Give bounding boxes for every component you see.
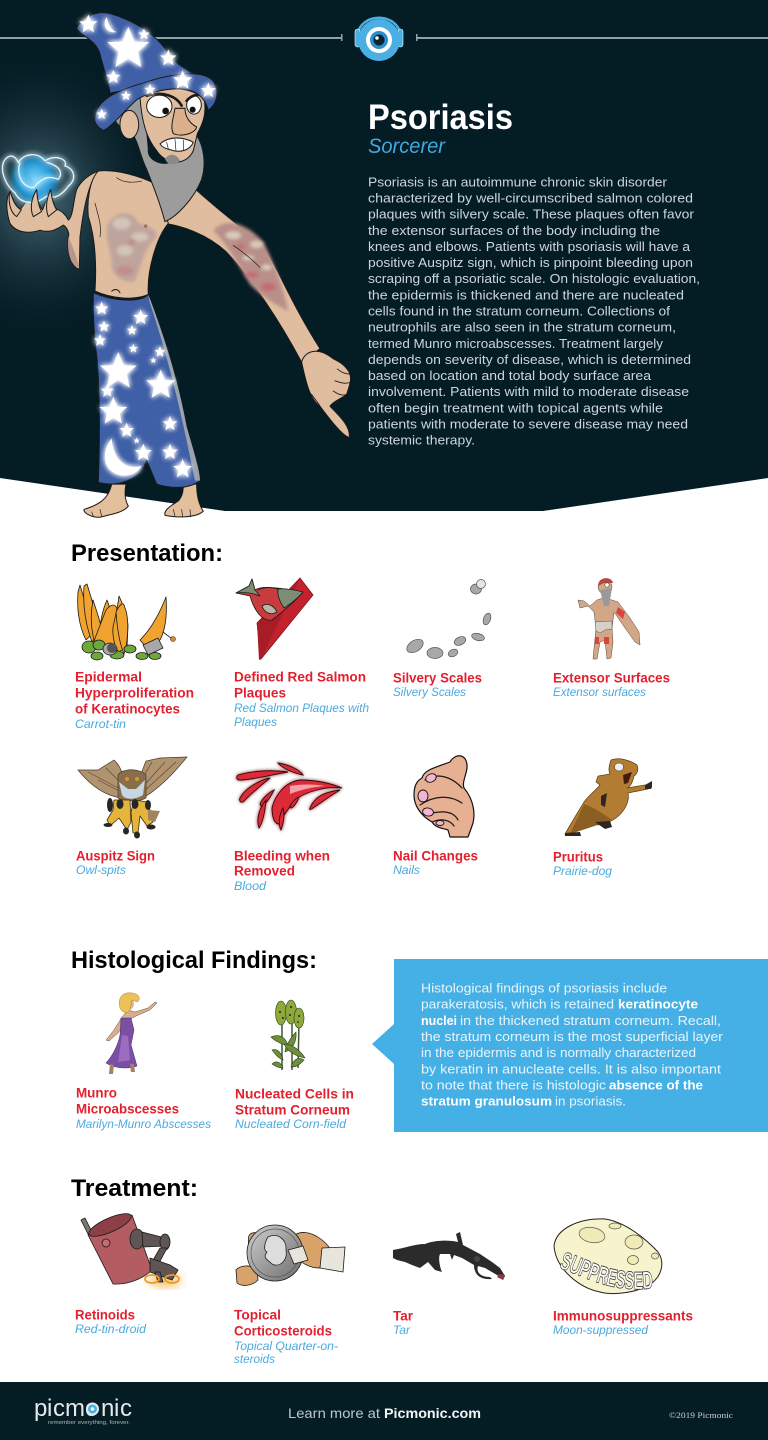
item: immunosuppressants (553, 1218, 693, 1337)
icon: prairie dog (565, 759, 652, 836)
item: tar (393, 1232, 505, 1337)
icon: carrot-tin (78, 584, 176, 660)
item: extensor surfaces (553, 578, 670, 699)
item: auspitz sign: Owl-spits (76, 865, 126, 877)
item: munro microabscesses: Microabscesses (76, 1102, 179, 1116)
wizard left arm and hand (7, 171, 98, 269)
header rule right (416, 34, 768, 41)
item: immunosuppressants: Moon-suppressed (553, 1325, 649, 1337)
heading: presentation: Presentation: (71, 540, 223, 567)
label: Extensor Surfaces (553, 670, 670, 686)
callout text: absence of the (609, 1078, 703, 1092)
hero panel background (0, 0, 768, 511)
footer (0, 1382, 768, 1440)
description text block: often begin treatment with topical agents while (368, 400, 663, 415)
footer call to action (288, 1405, 481, 1421)
description text block: the extensor surfaces of the body including the (368, 223, 660, 238)
label: Immunosuppressants (553, 1308, 693, 1324)
description text block: patients with moderate to severe disease may need (368, 416, 688, 431)
label: Defined Red Salmon (234, 670, 366, 684)
item: munro microabscesses: Marilyn-Munro Abscesses (76, 1119, 211, 1131)
wizard torso with chest plaque (88, 171, 168, 298)
label: Epidermal (75, 670, 142, 684)
label: Nail Changes (393, 848, 478, 864)
callout: histological explanation (372, 959, 768, 1132)
wizard face (120, 88, 205, 164)
glowing blue orb (2, 155, 74, 202)
item: nucleated cells: Nucleated Corn-field (235, 1119, 347, 1131)
item: munro microabscesses (76, 993, 211, 1131)
description text block: the epidermis is thickened and there are nucleated (368, 287, 684, 302)
item: pruritus (553, 759, 652, 878)
item: epidermal hyperproliferation (75, 584, 194, 731)
description text block: termed Munro microabscesses. Treatment largely (368, 336, 663, 351)
item: retinoids (75, 1209, 181, 1336)
header rule left (0, 34, 342, 41)
heading: histological findings: Histological Findings: (71, 947, 317, 974)
callout text: stratum granulosum (421, 1094, 552, 1109)
label: Retinoids (75, 1308, 135, 1322)
description text block: based on location and total body surface area (368, 368, 652, 383)
copyright: ©2019 Picmonic (669, 1410, 733, 1420)
item: extensor surfaces: Extensor surfaces (553, 687, 646, 699)
icon: tar brush (393, 1232, 505, 1280)
callout text: Histological findings of psoriasis include (421, 980, 667, 996)
footer logo: remember everything, forever. (48, 1420, 131, 1426)
item: defined red salmon plaques: Plaques (234, 717, 277, 729)
callout text: in the thickened stratum corneum. Recall, (460, 1013, 721, 1028)
icon: mini wizard (578, 578, 640, 659)
wizard hat (77, 13, 217, 130)
title: Psoriasis (368, 98, 513, 137)
wizard beard and hair (112, 93, 204, 222)
item: auspitz sign (76, 757, 187, 877)
icon: salmon on plaque (236, 578, 313, 660)
icon: red-tin-droid (81, 1209, 181, 1287)
label: Topical (234, 1308, 281, 1322)
description text block: depends on severity of disease, which is determined (368, 352, 691, 367)
item: topical corticosteroids: Topical Quarter-on- (234, 1341, 338, 1353)
callout text: in psoriasis. (555, 1094, 626, 1109)
item: retinoids: Red-tin-droid (75, 1324, 147, 1336)
item: topical corticosteroids: steroids (234, 1354, 275, 1366)
label: Silvery Scales (393, 670, 482, 686)
item: nucleated cells: Stratum Corneum (235, 1102, 350, 1118)
item: topical corticosteroids: Corticosteroids (234, 1324, 332, 1338)
label: Munro (76, 1086, 117, 1100)
item: silvery scales (393, 580, 492, 699)
item: epidermal hyperproliferation: Carrot-tin (75, 719, 126, 731)
item: bleeding when removed: Removed (234, 864, 295, 878)
description text block: plaques with silvery scale. These plaques often favor (368, 207, 695, 222)
description text block (368, 174, 700, 448)
footer logo: picmonic (34, 1395, 132, 1422)
item: bleeding when removed (234, 763, 342, 893)
icon: moon suppressed: SUPPRESSED (560, 1252, 652, 1290)
callout box with pointer (372, 959, 768, 1132)
wizard pointing hand (302, 351, 351, 437)
description text block: systemic therapy. (368, 432, 475, 448)
description text block: cells found in the stratum corneum. Collections of (368, 304, 670, 318)
description text block: involvement. Patients with mild to moderate disease (368, 384, 689, 399)
callout text: in the epidermis and is normally characterized (421, 1045, 696, 1060)
item: tar: Tar (393, 1325, 411, 1337)
description text block: knees and elbows. Patients with psoriasis will have a (368, 239, 691, 254)
description text block: neutrophils are also seen in the stratum corneum, (368, 320, 676, 335)
footer call to action: Learn more at (288, 1405, 380, 1421)
callout text: nuclei (421, 1013, 457, 1028)
callout text: by keratin in anucleate cells. It is also important (421, 1061, 721, 1076)
illustration: psoriasis sorcerer (2, 13, 351, 517)
item: defined red salmon plaques (234, 578, 369, 729)
description text block: positive Auspitz sign, which is pinpoint bleeding upon (368, 255, 693, 270)
subtitle: Sorcerer (368, 135, 446, 158)
item: bleeding when removed: Blood (234, 881, 267, 893)
label: Pruritus (553, 850, 603, 864)
item: epidermal hyperproliferation: of Keratinocytes (75, 702, 180, 716)
label: Tar (393, 1308, 414, 1324)
item: silvery scales: Silvery Scales (393, 687, 466, 699)
item: nail changes: Nails (393, 865, 420, 877)
description text block: scraping off a psoriatic scale. On histologic evaluation, (368, 271, 700, 286)
callout text (421, 980, 724, 1109)
item: defined red salmon plaques: Red Salmon Plaques with (234, 703, 369, 715)
icon: corn field (271, 1000, 305, 1070)
label: Bleeding when (234, 848, 330, 864)
heading: treatment: Treatment: (71, 1175, 198, 1202)
icon: fist with nails (414, 756, 474, 837)
wizard right arm with plaque (163, 183, 320, 362)
wizard feet and legs (84, 484, 203, 517)
wizard fingers over orb (9, 190, 57, 217)
label: Nucleated Cells in (235, 1086, 354, 1102)
icon: blood splatter (237, 763, 342, 830)
footer call to action: Picmonic.com (384, 1405, 481, 1421)
description text block: Psoriasis is an autoimmune chronic skin disorder (368, 174, 668, 190)
item: nucleated cells (235, 1000, 354, 1131)
description text block: characterized by well-circumscribed salmon colored (368, 191, 693, 206)
wizard star pants (93, 293, 200, 487)
icon: quarter on steroids (236, 1225, 345, 1285)
icon: picmonic eye with headphones (355, 18, 403, 61)
orb glow backdrop (0, 45, 165, 345)
icon: owl (78, 757, 187, 838)
icon: marilyn (106, 993, 157, 1074)
callout text: keratinocyte (618, 997, 698, 1012)
item: epidermal hyperproliferation: Hyperproliferation (75, 686, 194, 700)
item: defined red salmon plaques: Plaques (234, 686, 286, 700)
callout text: parakeratosis, which is retained (421, 997, 614, 1012)
item: topical corticosteroids (234, 1225, 345, 1366)
label: Auspitz Sign (76, 848, 155, 864)
callout text: the stratum corneum is the most superficial layer (421, 1029, 724, 1044)
icon: scales (404, 580, 492, 658)
item: nail changes (393, 756, 478, 877)
item: pruritus: Prairie-dog (553, 866, 613, 878)
callout text: to note that there is histologic (421, 1078, 606, 1092)
footer background (0, 1382, 768, 1440)
